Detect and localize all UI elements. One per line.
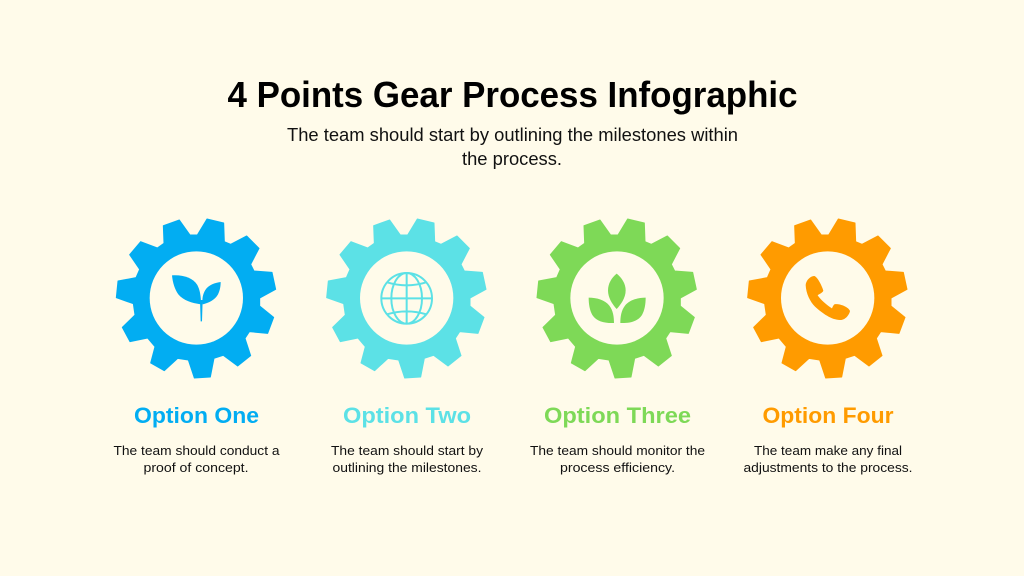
heading: option one: Option One — [134, 403, 259, 428]
text: option three description: The team should monitor the — [530, 443, 705, 458]
text: option two description: outlining the milestones. — [332, 460, 482, 475]
gear: option four — [748, 219, 907, 378]
text: option two description: The team should start by — [331, 443, 484, 458]
text: option four description — [744, 443, 912, 475]
heading: option two: Option Two — [343, 403, 471, 428]
text: option four description: The team make any final — [754, 443, 902, 458]
title: 4 Points Gear Process Infographic — [228, 74, 798, 115]
gear: option two — [327, 219, 486, 378]
text: option three description: process efficiency. — [560, 460, 675, 475]
text: option two description — [331, 443, 484, 475]
icon: sprout — [172, 275, 221, 321]
gear: option three — [537, 219, 696, 378]
text: option four description: adjustments to the process. — [744, 460, 912, 475]
gear: option one — [116, 219, 276, 378]
subtitle: the process. — [462, 149, 562, 169]
icon: globe — [381, 273, 432, 324]
icon: phone — [806, 276, 850, 320]
icon: three leaves — [589, 274, 646, 323]
text: option one description — [114, 443, 280, 475]
text: option one description: The team should conduct a — [114, 443, 280, 458]
heading: option four: Option Four — [762, 403, 894, 428]
heading: option three: Option Three — [544, 403, 691, 428]
text: option one description: proof of concept. — [144, 460, 248, 475]
subtitle — [287, 125, 738, 169]
subtitle: The team should start by outlining the milestones within — [287, 125, 738, 145]
text: option three description — [530, 443, 705, 475]
